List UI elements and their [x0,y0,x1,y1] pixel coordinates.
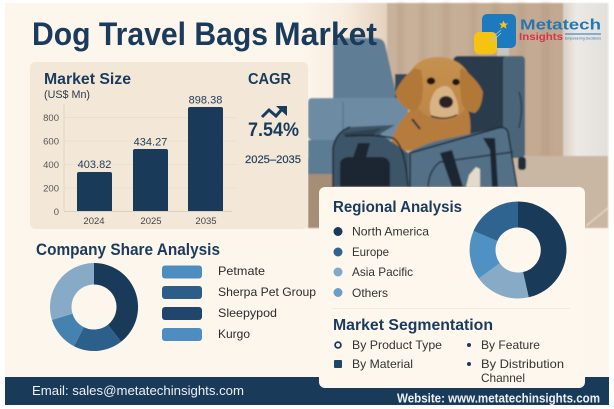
legend: regions: Asia Pacific [352,265,413,279]
donut chart: company share [50,263,138,351]
list: segments: By Product Type [352,338,442,352]
bar chart [43,94,236,227]
CAGR value: 7.54% [248,120,299,141]
list: segments: Channel [481,371,525,385]
list: segments: By Distribution [481,357,564,371]
bar chart: 403.82 [78,159,111,171]
bar chart: 2024 [83,216,105,227]
heading: company share analysis: Company Share Analysis [36,241,220,259]
bar chart: 898.38 [189,94,222,106]
dog [391,57,483,152]
bar chart: 400 [43,160,59,171]
list: segments: By Material [352,357,413,371]
bar chart: 200 [43,184,59,194]
heading: market size: Market Size [44,71,131,88]
title: Market [274,16,377,52]
list: segments [334,338,564,385]
panel: regional analysis and market segmentation [319,187,585,388]
logo icon [474,14,516,54]
heading: CAGR: CAGR [248,71,291,88]
sofa [333,38,397,98]
bar chart: 2035 [195,216,217,227]
footer website: Website: www.metatechinsights.com [397,392,600,406]
icon: growth arrow [262,106,287,117]
panel: market size and CAGR [30,62,308,229]
heading: market segmentation: Market Segmentation [333,317,493,334]
legend: company share: Petmate [218,264,265,278]
legend: company share: Sherpa Pet Group [218,285,316,299]
logo tagline: Empowering Decisions [565,36,601,40]
donut chart: regional share [470,202,566,298]
legend: company share: Sleepypod [218,306,277,320]
legend: company share [162,264,316,341]
footer email: Email: sales@metatechinsights.com [32,383,244,398]
legend: company share: Kurgo [218,327,250,341]
bar chart: 800 [43,113,59,124]
bar chart: 600 [43,136,59,148]
travel bag [333,125,517,187]
footer bar [5,377,609,406]
heading: regional analysis: Regional Analysis [333,199,462,216]
CAGR period: 2025–2035 [245,154,301,166]
photo: dog in travel bag [300,3,608,228]
bar chart: 434.27 [134,136,167,148]
logo wordmark: Metatech [520,18,601,34]
legend: regions: Others [352,286,388,300]
logo subtitle: Insights [519,31,563,43]
list: segments: By Feature [481,338,540,352]
title: Dog Travel Bags [32,16,268,52]
logo: Metatech Insights [474,14,601,54]
legend: regions: North America [352,224,429,238]
legend: regions [334,224,429,300]
unit label: (US$ Mn) [44,89,90,101]
bar chart: 2025 [140,216,162,227]
suitcase [497,46,509,58]
bar chart: 0 [54,207,59,218]
legend: regions: Europe [352,245,389,259]
